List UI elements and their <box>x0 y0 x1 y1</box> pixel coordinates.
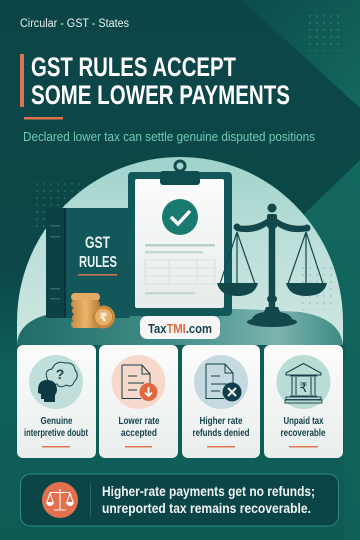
dome backdrop <box>17 157 343 345</box>
icon: coins <box>71 293 115 328</box>
card: genuine interpretive doubt: interpretive doubt <box>24 427 88 439</box>
title <box>20 52 290 110</box>
dots on dome <box>300 265 335 310</box>
icon: rules book: GST <box>85 234 110 252</box>
card: genuine interpretive doubt <box>17 345 96 458</box>
icon: orange scales <box>42 482 78 518</box>
icon: document with cross <box>194 355 248 409</box>
watermark badge <box>140 316 220 339</box>
card: genuine interpretive doubt: Genuine <box>40 415 73 427</box>
card: higher rate refunds denied <box>182 345 260 458</box>
watermark badge: TaxTMI.com <box>148 321 212 336</box>
icon: bank with rupee: ₹ <box>299 381 308 396</box>
card: lower rate accepted: Lower rate <box>118 415 160 427</box>
icon: rules book <box>46 208 130 318</box>
card: higher rate refunds denied: refunds denied <box>192 427 250 439</box>
callout: conclusion: unreported tax remains recoverable. <box>102 500 311 516</box>
callout: conclusion: Higher-rate payments get no refunds; <box>102 483 315 499</box>
icon: head with thought cloud: ? <box>56 366 64 382</box>
subtitle: Declared lower tax can settle genuine disputed positions <box>23 129 315 144</box>
category label: Circular - GST - States <box>20 18 129 30</box>
card: lower rate accepted: accepted <box>121 427 157 439</box>
title: GST RULES ACCEPT <box>31 52 236 82</box>
card: higher rate refunds denied: Higher rate <box>200 415 243 427</box>
card: unpaid tax recoverable <box>264 345 343 458</box>
platform <box>17 308 343 345</box>
icon: clipboard <box>128 161 232 316</box>
card: unpaid tax recoverable: Unpaid tax <box>284 415 324 427</box>
icon: document with down arrow <box>112 355 166 409</box>
card: lower rate accepted <box>99 345 178 458</box>
illustration: dome scene <box>17 157 343 345</box>
callout: conclusion <box>20 474 338 526</box>
icon: rules book: RULES <box>79 254 117 271</box>
accent underline <box>24 117 63 120</box>
icon: scales of justice <box>217 204 327 327</box>
card: unpaid tax recoverable: recoverable <box>280 427 326 439</box>
icon: coins: ₹ <box>99 310 108 324</box>
